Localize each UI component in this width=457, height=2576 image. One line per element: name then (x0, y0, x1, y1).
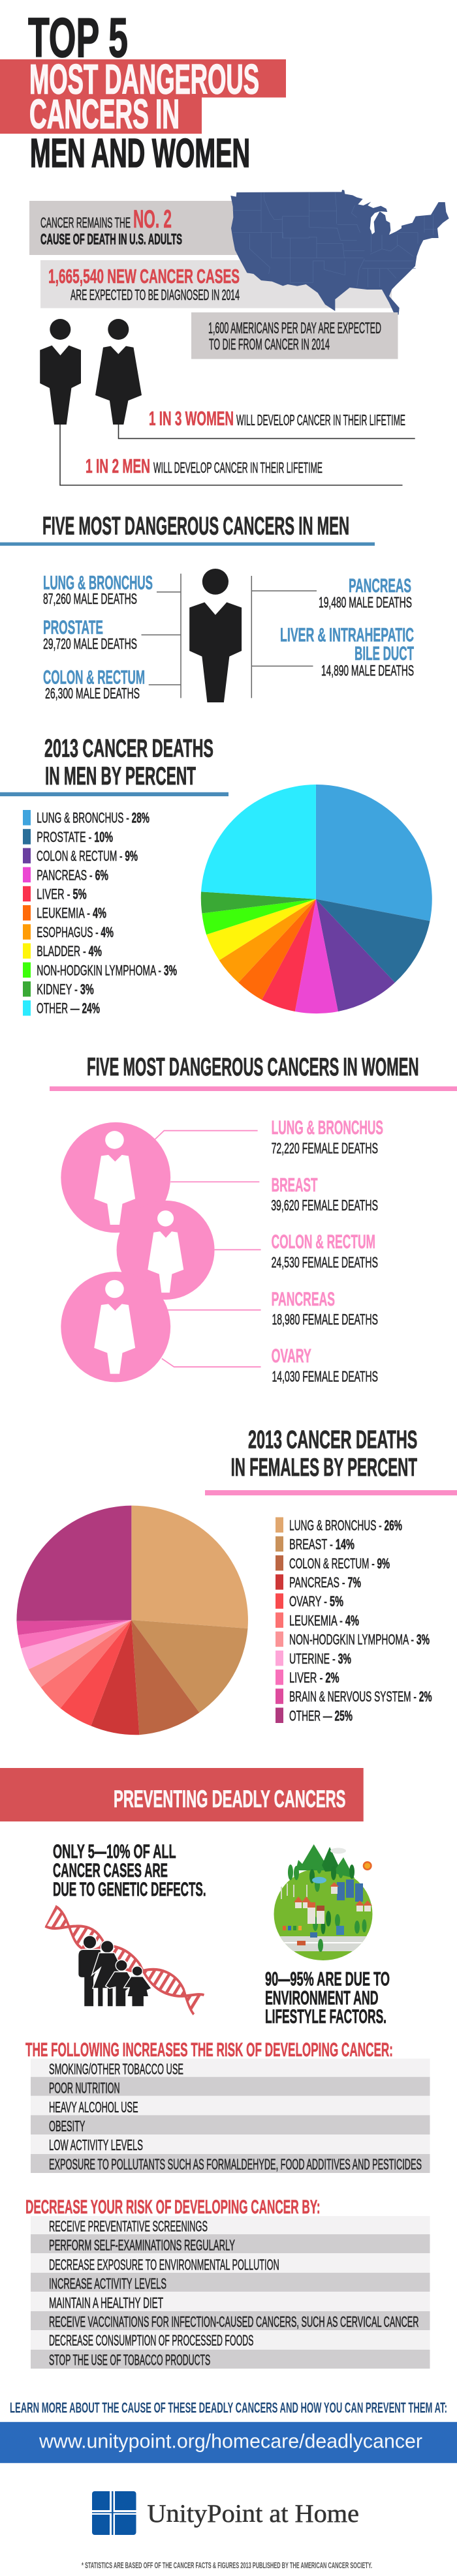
logo: UnityPoint at Home (92, 2491, 359, 2535)
list: decrease risk: DECREASE CONSUMPTION OF PROCESSED FOODS (49, 2331, 253, 2348)
stat: new cases: 1,665,540 NEW CANCER CASES (48, 265, 240, 288)
title (0, 7, 286, 176)
label: pancreas men (319, 575, 412, 611)
label: liver: BILE DUCT (355, 643, 414, 665)
connector lines: men (141, 574, 317, 698)
figure: man with cancer types (189, 569, 242, 702)
stat: number two cause (40, 205, 182, 248)
list: decrease risk: MAINTAIN A HEALTHY DIET (49, 2294, 163, 2311)
pie chart: women (16, 1506, 248, 1735)
label: liver (280, 625, 414, 679)
label: colon and rectum men (43, 666, 145, 702)
stat: number two cause: CAUSE OF DEATH IN U.S. ADULTS (40, 231, 182, 248)
label: pancreas women (272, 1289, 378, 1328)
logo: UnityPoint at Home: UnityPoint at Home (147, 2500, 359, 2528)
legend: men: PANCREAS - 6% (37, 867, 108, 883)
legend: men: LEUKEMIA - 4% (37, 905, 106, 921)
label: lung and bronchus men: LUNG & BRONCHUS (43, 573, 153, 594)
connector: man (60, 425, 402, 485)
title: TOP 5 (28, 7, 128, 69)
panel: daily deaths (191, 312, 398, 359)
stat: 1 in 3 women (149, 407, 405, 430)
label: ovary (272, 1345, 378, 1385)
legend: women: OVARY - 5% (289, 1593, 343, 1610)
heading: 2013 deaths in men: 2013 CANCER DEATHS (44, 735, 213, 763)
legend: women: LEUKEMIA - 4% (289, 1612, 359, 1628)
list: risk factors: POOR NUTRITION (49, 2080, 120, 2097)
list: risk factors (31, 2059, 430, 2173)
label: breast: BREAST (272, 1175, 318, 1196)
legend: men: ESOPHAGUS - 4% (37, 924, 114, 940)
label: prostate (43, 617, 137, 652)
url banner (0, 2422, 457, 2463)
legend: men: LIVER - 5% (37, 886, 87, 903)
icon: man (40, 319, 81, 425)
list: risk factors: HEAVY ALCOHOL USE (49, 2099, 138, 2116)
pie chart: men (201, 785, 432, 1013)
list: risk factors: SMOKING/OTHER TOBACCO USE (49, 2061, 183, 2078)
legend: women: BREAST - 14% (289, 1536, 355, 1553)
label: ovary: OVARY (272, 1345, 311, 1367)
panel: new cancer cases (40, 260, 392, 308)
label: pancreas women: 18,980 FEMALE DEATHS (272, 1311, 378, 1328)
legend: women: COLON & RECTUM - 9% (289, 1555, 390, 1572)
label: breast (271, 1175, 378, 1214)
heading: 2013 deaths in men: IN MEN BY PERCENT (45, 762, 196, 790)
stat: new cases: ARE EXPECTED TO BE DIAGNOSED IN 2014 (71, 286, 240, 303)
text: genetic defects: ONLY 5—10% OF ALL (53, 1841, 176, 1863)
list: decrease risk (31, 2216, 430, 2369)
banner: preventing deadly cancers (0, 1768, 364, 1821)
legend: men: OTHER — 24% (37, 1000, 100, 1017)
stat: 1 in 2 men: 1 IN 2 MEN (86, 455, 150, 477)
label: prostate: PROSTATE (43, 617, 103, 638)
list: decrease risk: RECEIVE PREVENTATIVE SCREENINGS (49, 2217, 208, 2234)
label: lung and bronchus women (272, 1117, 383, 1156)
legend: men: COLON & RECTUM - 9% (37, 848, 138, 864)
legend: men (23, 810, 177, 1017)
heading: five cancers in women (50, 1053, 457, 1091)
legend: men: LUNG & BRONCHUS - 28% (37, 810, 150, 826)
icon: woman (95, 319, 142, 425)
text: genetic defects: DUE TO GENETIC DEFECTS. (53, 1879, 206, 1900)
text: environment and lifestyle (265, 1968, 390, 2028)
label: ovary: 14,030 FEMALE DEATHS (272, 1368, 378, 1385)
list: risk factors: LOW ACTIVITY LEVELS (49, 2136, 143, 2153)
stat: number two cause: CANCER REMAINS THE (40, 215, 131, 231)
title: CANCERS IN (29, 91, 180, 137)
label: colon and rectum men: COLON & RECTUM (43, 666, 145, 689)
legend: women (276, 1517, 432, 1724)
list: decrease risk: PERFORM SELF-EXAMINATIONS REGULARLY (49, 2237, 235, 2254)
heading: 2013 deaths in men (0, 735, 228, 796)
connector: woman (119, 425, 415, 438)
legend: women: OTHER — 25% (289, 1707, 353, 1724)
list: risk factors: OBESITY (49, 2118, 85, 2134)
panel: number two cause of death (29, 201, 238, 255)
label: lung and bronchus men (43, 573, 153, 607)
stat: 1 in 2 men (86, 455, 323, 477)
label: prostate: 29,720 MALE DEATHS (43, 635, 137, 652)
label: colon and rectum women (272, 1231, 378, 1270)
label: colon and rectum men: 26,300 MALE DEATHS (45, 685, 140, 702)
url banner: www.unitypoint.org/homecare/deadlycancer (39, 2430, 422, 2453)
list: decrease risk: DECREASE EXPOSURE TO ENVIRONMENTAL POLLUTION (49, 2256, 279, 2273)
label: lung and bronchus women: 72,220 FEMALE DEATHS (272, 1139, 378, 1156)
label: colon and rectum women: COLON & RECTUM (272, 1231, 375, 1253)
list: decrease risk: STOP THE USE OF TOBACCO PRODUCTS (49, 2352, 210, 2369)
legend: women: LIVER - 2% (289, 1670, 339, 1686)
icon group: women in pink circles (61, 1122, 261, 1382)
title: MOST DANGEROUS (29, 55, 259, 102)
stat: new cases (48, 265, 240, 303)
text: genetic defects: CANCER CASES ARE (53, 1860, 168, 1881)
legend: men: KIDNEY - 3% (37, 981, 94, 998)
US map (230, 190, 449, 316)
legend: women: UTERINE - 3% (289, 1651, 351, 1667)
stat: deaths per day: TO DIE FROM CANCER IN 2014 (209, 336, 330, 353)
title: MEN AND WOMEN (30, 131, 250, 176)
text: genetic defects (53, 1841, 206, 1900)
heading: 2013 deaths in females (205, 1426, 457, 1495)
legend: women: PANCREAS - 7% (289, 1574, 361, 1591)
legend: men: PROSTATE - 10% (37, 829, 113, 845)
label: lung and bronchus men: 87,260 MALE DEATHS (43, 590, 137, 607)
list: decrease risk: INCREASE ACTIVITY LEVELS (49, 2275, 166, 2292)
legend: men: BLADDER - 4% (37, 943, 102, 959)
label: breast: 39,620 FEMALE DEATHS (271, 1197, 378, 1214)
stat: number two cause: NO. 2 (133, 205, 172, 233)
legend: men: NON-HODGKIN LYMPHOMA - 3% (37, 962, 177, 978)
icon: DNA helix with family (45, 1906, 204, 2014)
heading: five cancers in men (0, 512, 375, 546)
stat: deaths per day (208, 320, 381, 353)
legend: women: LUNG & BRONCHUS - 26% (289, 1517, 402, 1533)
stat: 1 in 3 women: 1 IN 3 WOMEN (149, 407, 234, 430)
label: pancreas men: PANCREAS (349, 575, 411, 597)
text: environment and lifestyle: ENVIRONMENT AND (265, 1988, 379, 2009)
label: colon and rectum women: 24,530 FEMALE DEATHS (272, 1253, 378, 1270)
label: pancreas women: PANCREAS (272, 1289, 335, 1310)
icon: green environment globe (271, 1844, 375, 1963)
